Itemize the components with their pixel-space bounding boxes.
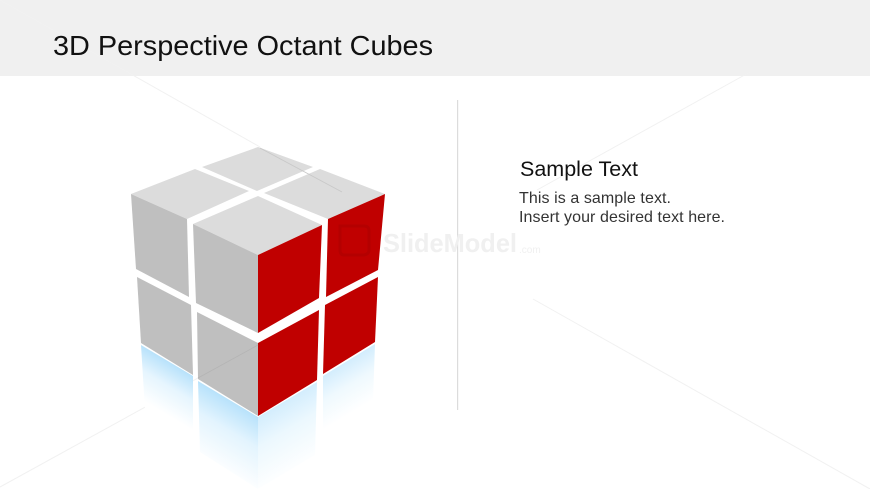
- faint line crossing lower face: [198, 345, 258, 378]
- text block: [519, 157, 725, 226]
- watermark logo on red face: [340, 226, 369, 255]
- watermark: SlideModel: [383, 228, 517, 258]
- heading: Sample Text: [520, 157, 638, 181]
- text block: Insert your desired text here.: [519, 209, 725, 226]
- body text: This is a sample text.: [519, 190, 671, 207]
- cube reflection: [141, 344, 375, 489]
- watermark: .com: [519, 245, 541, 256]
- right red faces: [258, 194, 385, 416]
- faint line crossing top face: [260, 148, 342, 192]
- title bar: [0, 0, 870, 76]
- vertical divider: [457, 100, 458, 410]
- left grey faces: [131, 194, 258, 416]
- octant cube: [131, 147, 385, 416]
- title: 3D Perspective Octant Cubes: [53, 30, 433, 61]
- top faces: [131, 147, 385, 255]
